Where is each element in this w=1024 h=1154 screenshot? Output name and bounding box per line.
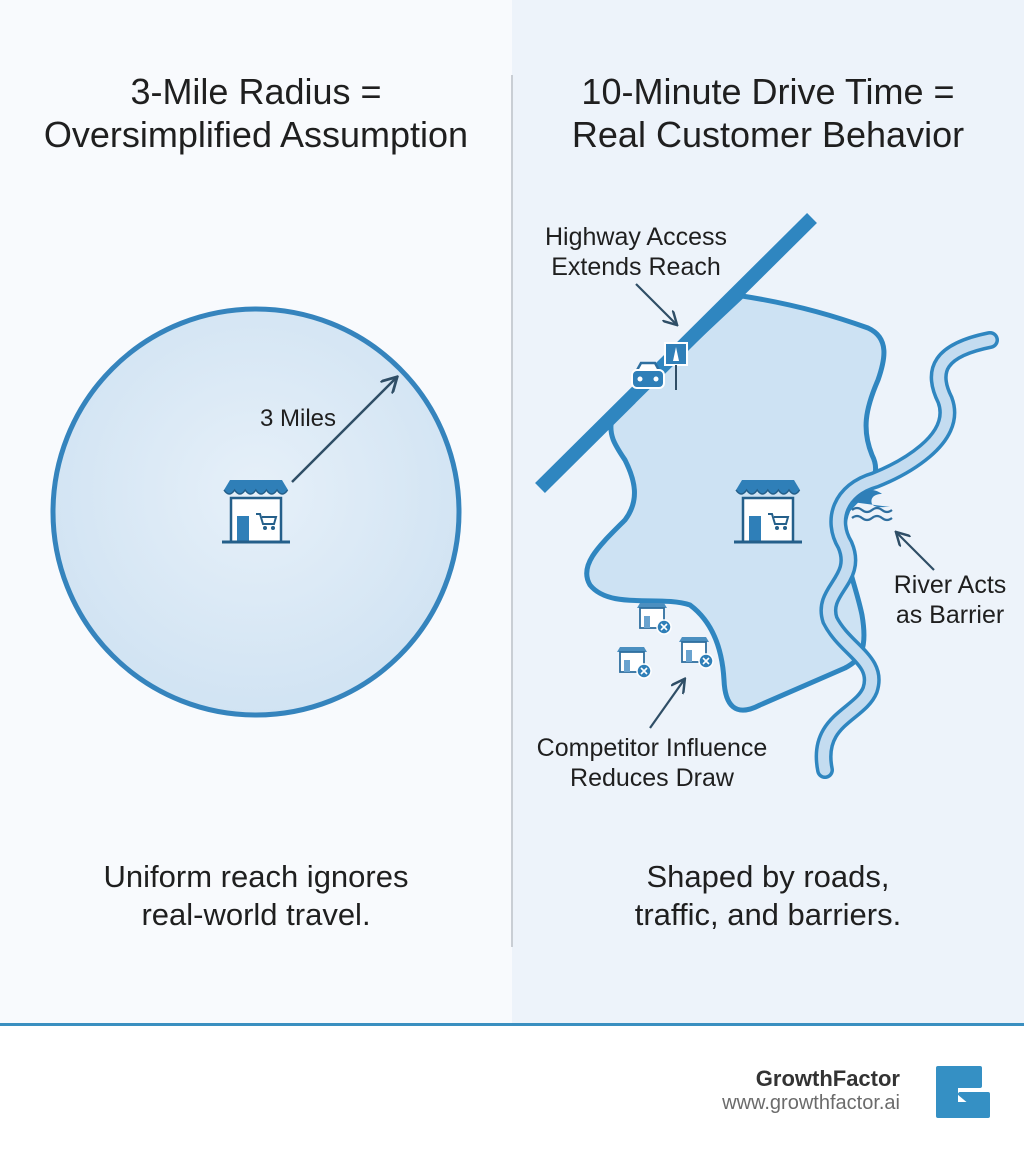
title right: Real Customer Behavior <box>572 114 964 155</box>
icon: car and highway sign <box>632 343 687 390</box>
icons: competitors <box>617 603 713 678</box>
label: competitor <box>537 734 767 792</box>
title left: 3-Mile Radius = <box>130 71 382 112</box>
label: highway: Highway Access <box>545 223 727 251</box>
highway <box>540 218 812 488</box>
caption right: traffic, and barriers. <box>635 897 901 932</box>
arrow: 3 miles <box>292 378 396 482</box>
label: river: as Barrier <box>896 601 1004 629</box>
left circle <box>53 309 459 715</box>
title right: 10-Minute Drive Time = <box>581 71 955 112</box>
footer brand: www.growthfactor.ai <box>722 1092 900 1114</box>
label: river: River Acts <box>894 571 1006 599</box>
label: highway: Extends Reach <box>551 253 721 281</box>
label: competitor: Reduces Draw <box>570 764 734 792</box>
icon: store right <box>734 480 802 542</box>
icon: store <box>222 480 290 542</box>
title left: Oversimplified Assumption <box>44 114 468 155</box>
icon: wave <box>852 490 892 520</box>
caption right: Shaped by roads, <box>646 859 890 894</box>
left circle: 3 Miles <box>260 405 336 432</box>
label: river <box>894 571 1006 629</box>
caption right <box>635 859 901 932</box>
arrows <box>636 284 676 324</box>
caption left: real-world travel. <box>141 897 371 932</box>
label: highway <box>545 223 727 281</box>
drive-time area <box>587 296 884 710</box>
logo <box>936 1066 990 1118</box>
title right <box>572 71 964 155</box>
caption left: Uniform reach ignores <box>104 859 408 894</box>
right panel background <box>512 0 1024 1024</box>
footer brand: GrowthFactor <box>756 1066 900 1091</box>
river <box>824 340 990 770</box>
left panel background <box>0 0 512 1024</box>
title left <box>44 71 468 155</box>
label: competitor: Competitor Influence <box>537 734 767 762</box>
caption left <box>104 859 408 932</box>
footer brand <box>722 1066 900 1114</box>
